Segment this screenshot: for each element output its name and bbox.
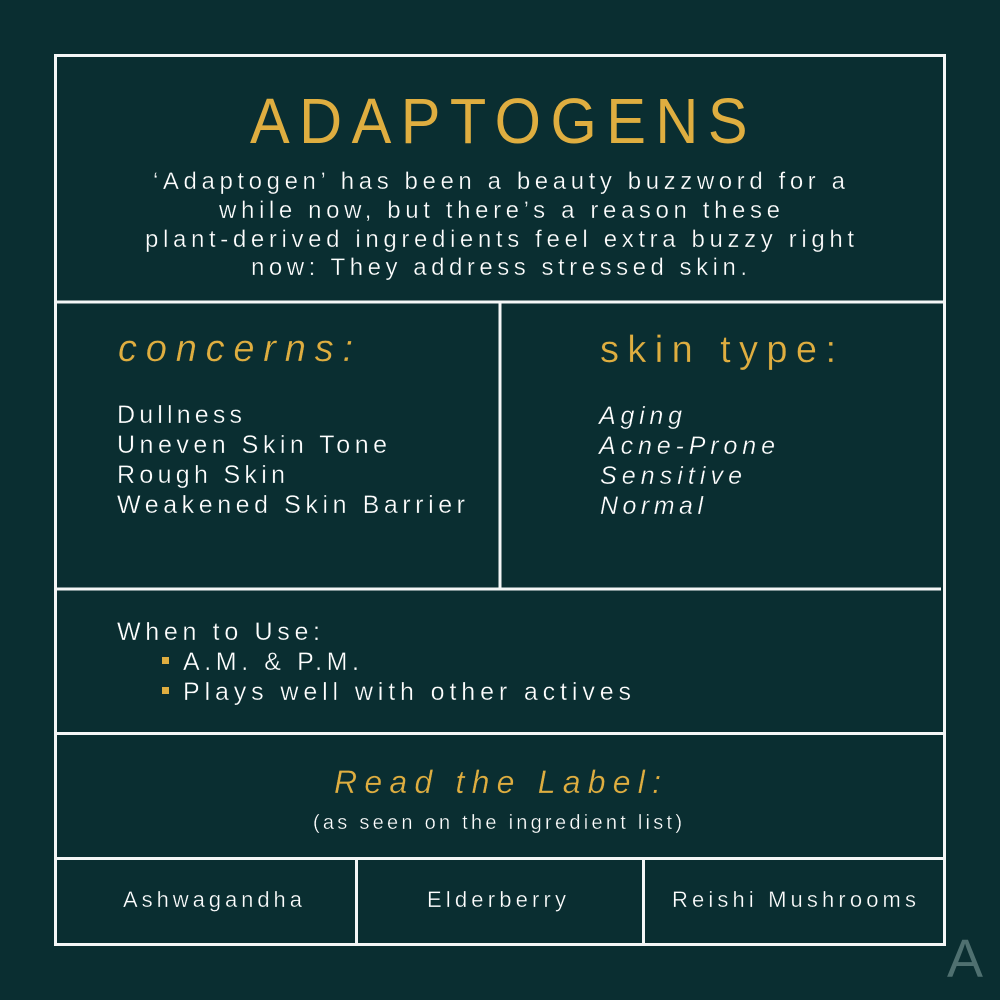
panel: header <box>145 86 854 281</box>
title: ADAPTOGENS <box>250 86 748 157</box>
skin type list: Acne-Prone <box>597 432 775 460</box>
concerns list: Weakened Skin Barrier <box>117 491 465 519</box>
ingredient: Reishi Mushrooms: Reishi Mushrooms <box>672 887 916 912</box>
panel: when to use <box>117 618 631 706</box>
concerns heading: concerns: <box>118 328 353 370</box>
skin type list <box>597 402 775 520</box>
panel: concerns <box>117 328 465 519</box>
frame and grid lines <box>54 54 946 946</box>
skin type list: Aging <box>597 402 682 430</box>
read the label heading: Read the Label: <box>334 764 661 800</box>
intro text <box>145 168 854 281</box>
skin type list: Normal <box>600 492 704 520</box>
bullet: A.M. and P.M.: A.M. & P.M. <box>183 648 359 676</box>
read the label subheading: (as seen on the ingredient list) <box>313 812 682 834</box>
panel: read the label <box>313 764 682 834</box>
ingredient: Elderberry: Elderberry <box>427 887 566 912</box>
panel: skin type <box>597 329 836 520</box>
intro text: plant-derived ingredients feel extra buzzy right <box>145 226 854 253</box>
when to use heading: When to Use: <box>117 618 320 646</box>
skin type heading: skin type: <box>600 329 836 371</box>
concerns list: Uneven Skin Tone <box>117 431 387 459</box>
concerns list: Dullness <box>117 401 242 429</box>
logo mark: A <box>947 929 983 989</box>
intro text: while now, but there’s a reason these <box>218 197 780 224</box>
intro text: now: They address stressed skin. <box>251 254 747 281</box>
bullet: plays well with other actives: Plays well with other actives <box>183 678 631 706</box>
intro text: ‘Adaptogen’ has been a beauty buzzword for a <box>153 168 846 195</box>
concerns list <box>117 401 465 519</box>
ingredient: Ashwagandha: Ashwagandha <box>123 887 303 912</box>
skin type list: Sensitive <box>600 462 742 490</box>
concerns list: Rough Skin <box>117 461 285 489</box>
